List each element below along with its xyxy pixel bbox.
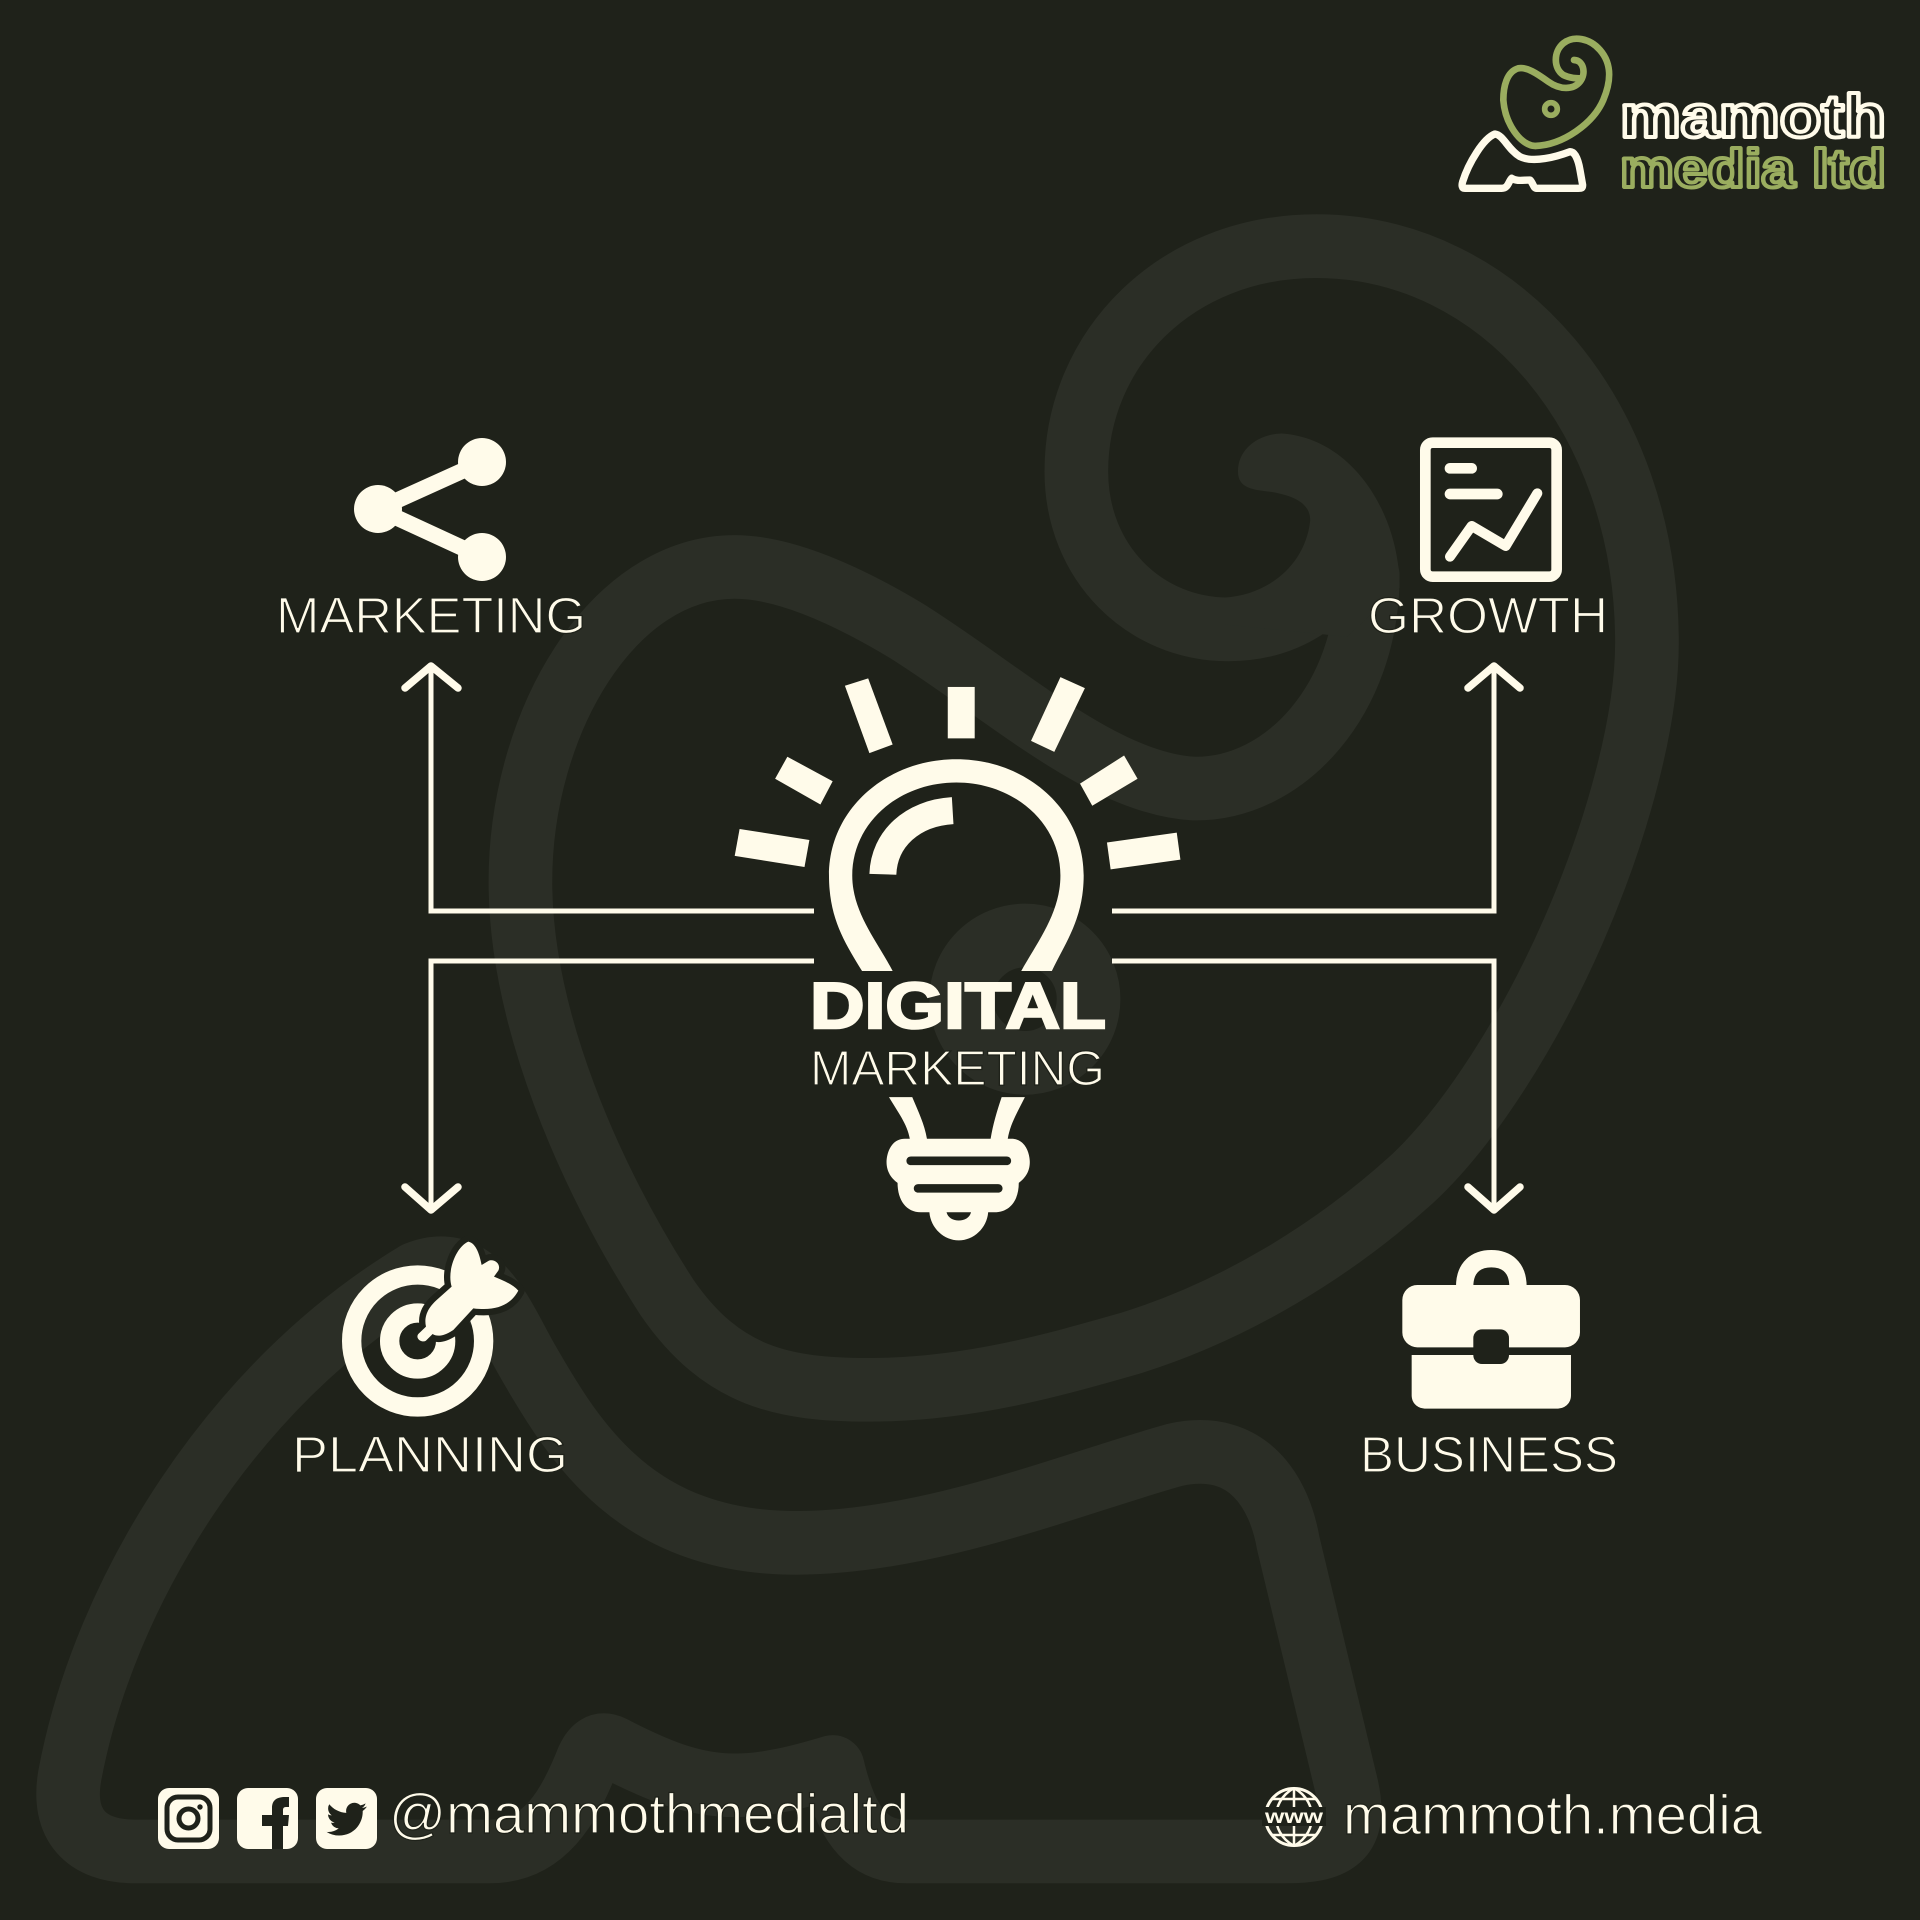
social handle: @mammothmedialtd [389, 1782, 909, 1845]
label: business: BUSINESS [1360, 1426, 1618, 1483]
bulb base [887, 1097, 1030, 1240]
logo [1462, 39, 1886, 199]
bulb highlight [883, 811, 953, 874]
label: growth: GROWTH [1368, 587, 1608, 644]
connector arrow: to marketing [405, 666, 814, 911]
icon: share [354, 438, 506, 581]
icon: facebook [237, 1788, 298, 1849]
icon: target with dart [352, 1242, 518, 1407]
website: mammoth.media [1343, 1783, 1763, 1846]
connector arrow: to planning [405, 961, 814, 1210]
logo icon: elephant [1462, 39, 1609, 188]
label: planning: PLANNING [292, 1426, 568, 1483]
title word: digital: DIGITAL [810, 969, 1106, 1042]
icon: globe www: www [1264, 1807, 1323, 1828]
icon: twitter [316, 1788, 377, 1849]
watermark: elephant outline [68, 246, 1647, 1851]
icon: globe www [1262, 1788, 1326, 1846]
icon: briefcase [1402, 1259, 1580, 1409]
bulb glass [829, 759, 1084, 971]
bulb rays [735, 677, 1180, 869]
label: marketing: MARKETING [276, 587, 586, 644]
title word: marketing: MARKETING [810, 1042, 1105, 1096]
connector arrow: to growth [1112, 666, 1520, 911]
icon: growth chart [1425, 443, 1557, 577]
icon: instagram [158, 1788, 219, 1849]
title: digital marketing [810, 969, 1106, 1096]
logo text: mamoth: mamoth [1620, 83, 1886, 150]
icon: light bulb [735, 677, 1180, 1240]
connector arrow: to business [1112, 961, 1520, 1210]
logo text: media ltd: media ltd [1620, 139, 1886, 199]
